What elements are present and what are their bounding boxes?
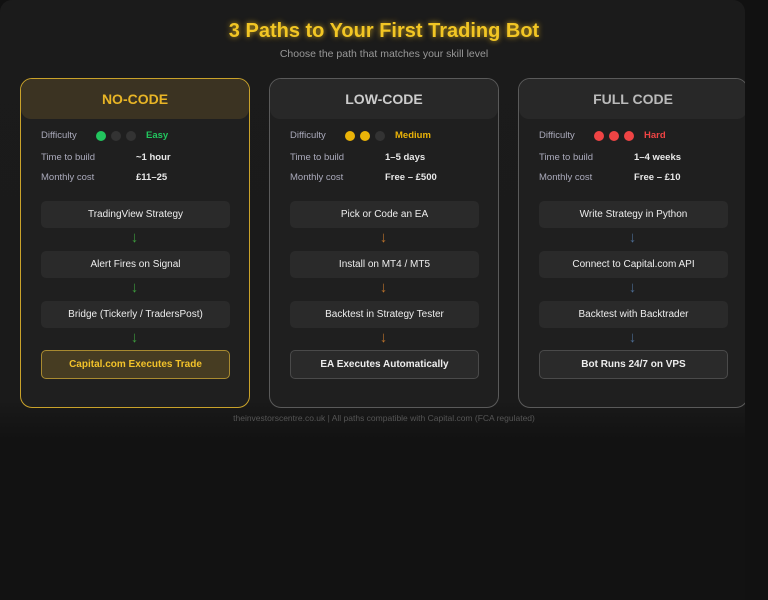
cost row: Free – £10 bbox=[634, 172, 680, 183]
difficulty row bbox=[539, 130, 666, 141]
difficulty row: Difficulty bbox=[539, 130, 575, 141]
step 1: TradingView Strategy bbox=[88, 209, 183, 220]
cost row: Monthly cost bbox=[290, 172, 343, 183]
step 3 bbox=[41, 301, 230, 328]
arrow: ↓ bbox=[380, 329, 387, 346]
title: 3 Paths to Your First Trading Bot bbox=[229, 20, 539, 42]
step 3 bbox=[539, 301, 728, 328]
heading: full code: FULL CODE bbox=[593, 91, 673, 107]
panel: low-code bbox=[269, 78, 499, 408]
arrow: ↓ bbox=[131, 229, 138, 246]
difficulty row bbox=[290, 130, 431, 141]
cost row: Free – £500 bbox=[385, 172, 437, 183]
step 3 bbox=[290, 301, 479, 328]
step 3: Backtest with Backtrader bbox=[578, 309, 689, 320]
difficulty row: Hard bbox=[644, 130, 666, 141]
panel: full code bbox=[518, 78, 748, 408]
arrow: ↓ bbox=[131, 279, 138, 296]
final step bbox=[539, 350, 728, 379]
final step: Capital.com Executes Trade bbox=[69, 359, 202, 370]
time row bbox=[290, 152, 425, 163]
heading: no-code bbox=[21, 79, 249, 119]
difficulty row: Difficulty bbox=[290, 130, 326, 141]
time row: 1–5 days bbox=[385, 152, 425, 163]
final step: Bot Runs 24/7 on VPS bbox=[581, 359, 686, 370]
time row: Time to build bbox=[290, 152, 344, 163]
step 1 bbox=[290, 201, 479, 228]
difficulty row: Easy bbox=[146, 130, 168, 141]
step 2: Install on MT4 / MT5 bbox=[339, 259, 430, 270]
step 1 bbox=[41, 201, 230, 228]
step 1: Pick or Code an EA bbox=[341, 209, 428, 220]
step 2: Connect to Capital.com API bbox=[572, 259, 695, 270]
arrow: ↓ bbox=[629, 329, 636, 346]
time row: Time to build bbox=[41, 152, 95, 163]
final step bbox=[290, 350, 479, 379]
step 1 bbox=[539, 201, 728, 228]
time row bbox=[539, 152, 681, 163]
arrow: ↓ bbox=[131, 329, 138, 346]
panel: no-code bbox=[20, 78, 250, 408]
step 2: Alert Fires on Signal bbox=[90, 259, 181, 270]
final step: EA Executes Automatically bbox=[320, 359, 449, 370]
step 2 bbox=[539, 251, 728, 278]
cost row: £11–25 bbox=[136, 172, 167, 183]
difficulty row: Medium bbox=[395, 130, 431, 141]
heading: full code bbox=[519, 79, 747, 119]
arrow: ↓ bbox=[380, 229, 387, 246]
cost row: Monthly cost bbox=[539, 172, 592, 183]
subtitle: Choose the path that matches your skill level bbox=[280, 48, 488, 60]
cost row bbox=[539, 172, 680, 183]
step 3: Backtest in Strategy Tester bbox=[325, 309, 444, 320]
step 2 bbox=[290, 251, 479, 278]
heading: low-code: LOW-CODE bbox=[345, 91, 423, 107]
time row: 1–4 weeks bbox=[634, 152, 681, 163]
arrow: ↓ bbox=[380, 279, 387, 296]
cost row: Monthly cost bbox=[41, 172, 94, 183]
final step bbox=[41, 350, 230, 379]
step 3: Bridge (Tickerly / TradersPost) bbox=[68, 309, 203, 320]
difficulty row bbox=[41, 130, 168, 141]
footer: theinvestorscentre.co.uk | All paths compatible with Capital.com (FCA regulated) bbox=[233, 413, 535, 423]
step 1: Write Strategy in Python bbox=[580, 209, 687, 220]
arrow: ↓ bbox=[629, 229, 636, 246]
time row: ~1 hour bbox=[136, 152, 171, 163]
time row bbox=[41, 152, 171, 163]
arrow: ↓ bbox=[629, 279, 636, 296]
step 2 bbox=[41, 251, 230, 278]
heading: low-code bbox=[270, 79, 498, 119]
heading: no-code: NO-CODE bbox=[102, 91, 168, 107]
cost row bbox=[290, 172, 437, 183]
difficulty row: Difficulty bbox=[41, 130, 77, 141]
cost row bbox=[41, 172, 167, 183]
time row: Time to build bbox=[539, 152, 593, 163]
